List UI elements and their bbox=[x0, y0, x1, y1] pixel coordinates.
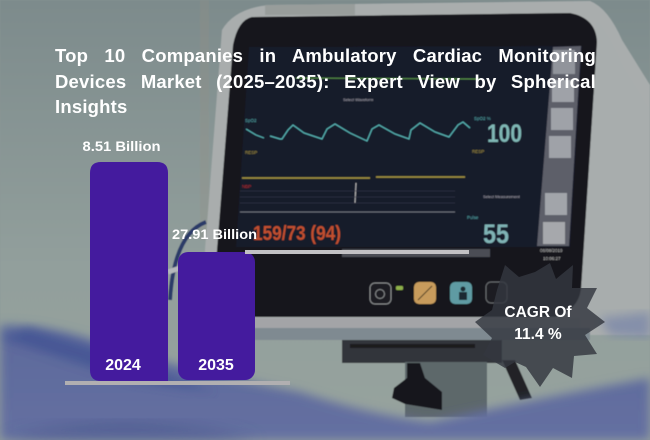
monitor casing bbox=[205, 1, 650, 335]
screen readouts: 100 bbox=[487, 120, 522, 148]
background photo: patient monitor: SpO2 % bbox=[474, 116, 491, 121]
background photo: patient monitor: 55 bbox=[483, 219, 509, 249]
background photo: patient monitor: RESP bbox=[472, 149, 484, 154]
blue blanket bbox=[0, 325, 650, 440]
monitor screen bbox=[236, 46, 582, 247]
waveforms bbox=[246, 129, 264, 138]
bar: 2035 bbox=[178, 252, 255, 380]
status strip under screen bbox=[342, 249, 490, 257]
background photo: patient monitor: SpO2 bbox=[245, 118, 257, 123]
bar: 2024 bbox=[90, 162, 168, 381]
badge: CAGR: CAGR Of bbox=[504, 304, 572, 321]
value label: 2035: 27.91 Billion bbox=[172, 226, 257, 242]
monitor mount bbox=[205, 318, 580, 335]
cable bbox=[170, 222, 206, 300]
title: Insights bbox=[55, 96, 128, 117]
background photo: patient monitor: RESP bbox=[245, 150, 257, 155]
background photo: patient monitor: 10:06:27 bbox=[543, 256, 561, 261]
background photo: patient monitor: Select Waveform bbox=[343, 97, 374, 102]
title: Top 10 Companies in Ambulatory Cardiac Monitoring bbox=[55, 45, 596, 66]
divider bar over monitor bbox=[245, 250, 469, 254]
value label: 2024: 8.51 Billion bbox=[82, 138, 160, 154]
bar: 2024: 2024 bbox=[105, 357, 141, 374]
background photo: patient monitor: 08/08/2019 bbox=[540, 248, 563, 253]
title: Devices Market (2025–2035): Expert View by Spherical bbox=[55, 70, 596, 92]
title bbox=[55, 45, 596, 117]
badge: CAGR bbox=[475, 263, 605, 387]
background photo: patient monitor: NBP bbox=[242, 184, 251, 189]
background photo: patient monitor: Pulse bbox=[467, 215, 479, 220]
background photo: patient monitor: 159/73 (94) bbox=[253, 223, 341, 245]
background photo: patient monitor: Select Measurement bbox=[483, 194, 521, 199]
monitor front buttons bbox=[370, 283, 391, 304]
bar: 2035: 2035 bbox=[198, 357, 234, 374]
chart baseline bbox=[65, 381, 290, 385]
monitor bezel bbox=[212, 13, 597, 317]
badge: CAGR: 11.4 % bbox=[514, 326, 562, 343]
